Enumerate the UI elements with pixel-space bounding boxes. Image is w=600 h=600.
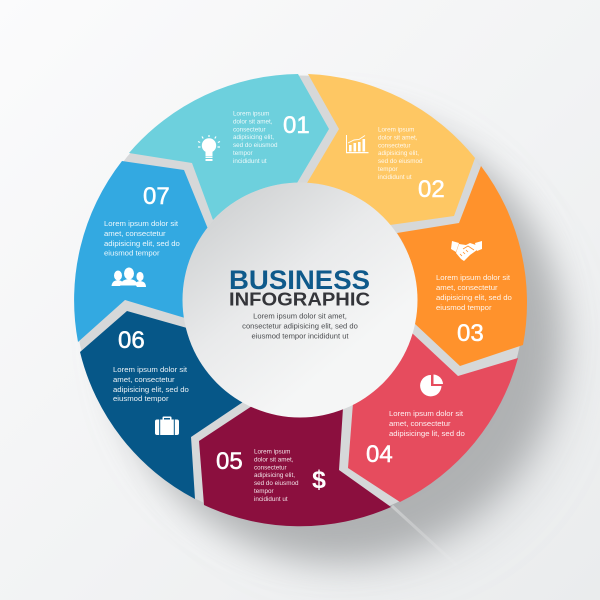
icon: dollar: $	[312, 466, 326, 494]
text 02: Lorem ipsum	[378, 126, 414, 134]
panel: step 07	[74, 161, 208, 342]
text 04: Lorem ipsum dolor sit	[389, 409, 464, 418]
segment 04	[348, 333, 518, 502]
text 05: adipisicing elit,	[254, 472, 295, 479]
text 01: incididunt ut	[233, 158, 267, 165]
number 03: 03	[457, 320, 484, 347]
text 06: amet, consectetur	[113, 375, 175, 384]
text 05: Lorem ipsum	[254, 448, 290, 456]
text 05: incididunt ut	[254, 496, 288, 503]
text 06: adipisicing elit, sed do	[113, 385, 189, 394]
text 04: adipisicinge lit, sed do	[389, 429, 465, 438]
text 02: tempor	[378, 166, 398, 173]
number 02: 02	[418, 176, 445, 203]
text 05: consectetur	[254, 464, 287, 471]
text 02: dolor sit amet,	[378, 134, 418, 141]
segment 05	[199, 406, 391, 526]
panel: step 02	[307, 74, 475, 225]
segment 06	[80, 311, 243, 499]
number 04: 04	[366, 441, 393, 468]
panel: step 03	[397, 166, 527, 366]
icon: light bulb	[198, 135, 220, 161]
ring base	[76, 76, 524, 524]
text 01: Lorem ipsum	[233, 110, 269, 118]
text 03: eiusmod tempor	[436, 303, 492, 312]
text 07: amet, consectetur	[104, 229, 166, 238]
panel: step 01	[129, 74, 329, 220]
text 01: dolor sit amet,	[233, 118, 273, 125]
text 05: tempor	[254, 488, 274, 495]
text 06: Lorem ipsum dolor sit	[113, 365, 188, 374]
segment 07	[74, 161, 208, 342]
heading: business: BUSINESS	[229, 265, 370, 295]
icon: pie chart	[420, 374, 443, 396]
panel: step 05	[199, 406, 391, 526]
text 01: tempor	[233, 150, 253, 157]
segment 02	[307, 74, 475, 225]
text 01: sed do eiusmod	[233, 142, 278, 149]
text 06: eiusmod tempor	[113, 394, 169, 403]
text 03: adipisicing elit, sed do	[436, 293, 512, 302]
icon: people	[112, 268, 146, 287]
text 03: Lorem ipsum dolor sit	[436, 273, 511, 282]
number 01: 01	[283, 112, 310, 139]
text 04: amet, consectetur	[389, 419, 451, 428]
text 05: dolor sit amet,	[254, 456, 294, 463]
text 01: consectetur	[233, 126, 266, 133]
text 02: sed do eiusmod	[378, 158, 423, 165]
center description: consectetur adipisicing elit, sed do	[242, 322, 358, 330]
text 01: adipisicing elit,	[233, 134, 274, 141]
shadow highlight	[392, 506, 462, 570]
text 03: amet, consectetur	[436, 283, 498, 292]
text 02: consectetur	[378, 142, 411, 149]
title	[229, 265, 370, 340]
panel: step 04	[348, 333, 518, 502]
number 05: 05	[216, 448, 243, 475]
icon: handshake	[451, 241, 482, 261]
center description: Lorem ipsum dolor sit amet,	[253, 312, 347, 320]
text 07: Lorem ipsum dolor sit	[104, 219, 179, 228]
text 05: sed do eiusmod	[254, 480, 299, 487]
panel: step 06	[80, 311, 243, 499]
icon: suitcase	[155, 416, 179, 435]
heading: infographic: INFOGRAPHIC	[229, 290, 370, 310]
text 07: eiusmod tempor	[104, 248, 160, 258]
text 07: adipisicing elit, sed do	[104, 239, 180, 248]
text 02: incididunt ut	[378, 174, 412, 181]
segment 01	[129, 74, 329, 220]
icon: bar chart	[346, 135, 368, 153]
segment 03	[397, 166, 527, 366]
text 02: adipisicing elit,	[378, 150, 419, 157]
number 07: 07	[143, 183, 170, 210]
soft shadow	[111, 111, 559, 559]
wide faint shadow	[157, 157, 567, 567]
number 06: 06	[118, 327, 145, 354]
center description: eiusmod tempor incididunt ut	[251, 332, 349, 340]
center circle	[182, 182, 418, 418]
